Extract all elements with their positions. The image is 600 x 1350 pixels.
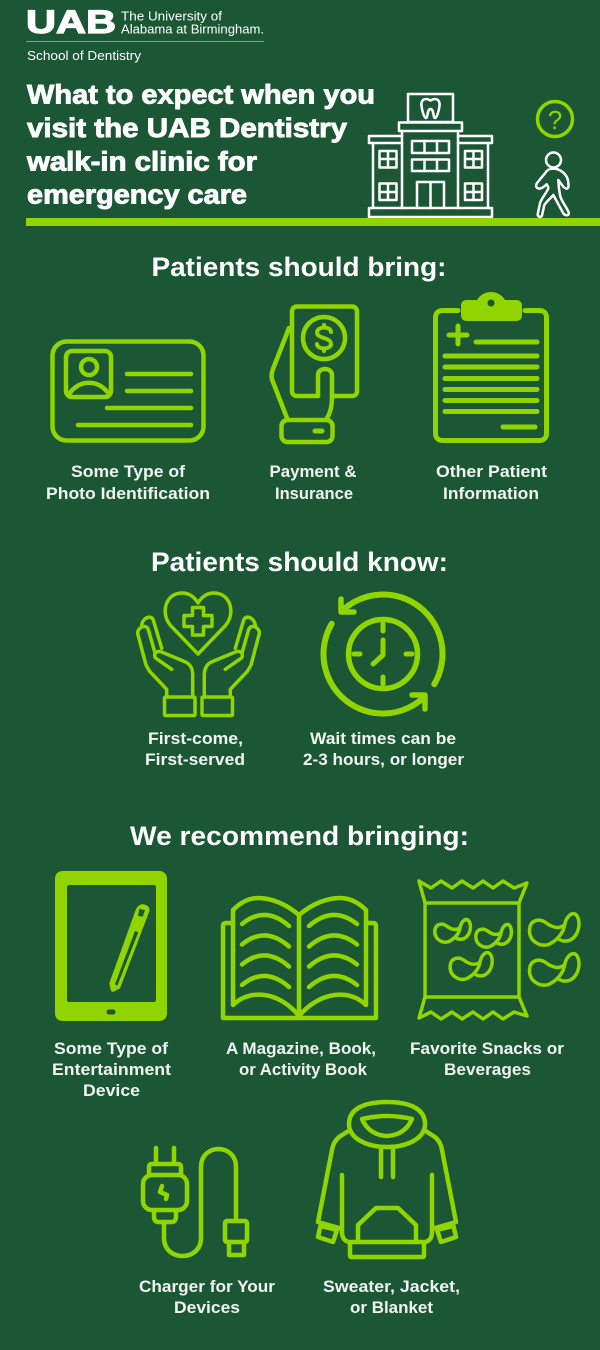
icon: walking person [536,152,569,217]
icon: photo ID card [52,342,204,440]
title: emergency care [27,180,247,210]
label: magazine or book: A Magazine, Book, [226,1040,376,1058]
title [26,80,375,210]
label: entertainment device [52,1040,172,1100]
label: magazine or book [226,1040,376,1079]
icon: clock with circular arrows [323,594,443,714]
icon: open book [223,898,376,1018]
heading: we recommend bringing: We recommend bringing: [130,821,469,851]
icon: hands holding heart [138,593,259,716]
icon: hand holding payment card [272,306,357,442]
label: wait times: 2-3 hours, or longer [303,751,465,769]
label: photo identification: Some Type of [71,463,186,481]
heading: patients should know: Patients should know: [151,547,448,577]
label: first-come first-served [145,730,245,769]
title: What to expect when you [27,80,375,110]
label: other patient information: Information [443,485,539,503]
divider bar [26,218,600,226]
label: sweater jacket or blanket: Sweater, Jacket, [323,1278,460,1296]
label: entertainment device: Some Type of [54,1040,169,1058]
logo: UAB School of Dentistry: UAB [26,4,116,40]
label: entertainment device: Device [83,1082,140,1100]
icon: charger and cable [143,1148,247,1256]
label: snacks or beverages [410,1040,565,1079]
label: first-come first-served: First-come, [148,730,243,748]
label: entertainment device: Entertainment [52,1061,172,1079]
icon: clinic building [369,94,492,217]
logo: UAB School of Dentistry [26,4,264,63]
label: charger: Devices [174,1299,240,1317]
icon: hoodie [318,1102,456,1257]
icon: tablet and stylus [55,871,167,1021]
label: charger: Charger for Your [139,1278,276,1296]
icon: snack bag and chips [419,881,579,1019]
label: wait times: Wait times can be [310,730,456,748]
label: payment and insurance: Insurance [275,485,353,503]
label: other patient information [436,463,548,503]
icon: clipboard [436,292,546,440]
label: photo identification [46,463,210,503]
logo: UAB School of Dentistry: Alabama at Birmingham. [121,22,264,36]
logo: UAB School of Dentistry: School of Dentistry [27,49,142,63]
label: payment and insurance: Payment & [270,463,357,481]
label: wait times [303,730,465,769]
label: payment and insurance [270,463,357,503]
label: other patient information: Other Patient [436,463,548,481]
label: magazine or book: or Activity Book [239,1061,368,1079]
heading: patients should bring: Patients should bring: [152,252,446,282]
title: walk-in clinic for [26,146,258,176]
label: snacks or beverages: Favorite Snacks or [410,1040,565,1058]
icon: question mark: ? [548,105,562,135]
label: first-come first-served: First-served [145,751,245,769]
logo: UAB School of Dentistry: The University of [121,10,223,24]
label: sweater jacket or blanket: or Blanket [350,1299,434,1317]
label: snacks or beverages: Beverages [444,1061,531,1079]
icon: question mark [538,102,572,136]
label: sweater jacket or blanket [323,1278,460,1317]
title: visit the UAB Dentistry [27,113,347,143]
label: photo identification: Photo Identification [46,485,210,503]
label: charger [139,1278,276,1317]
